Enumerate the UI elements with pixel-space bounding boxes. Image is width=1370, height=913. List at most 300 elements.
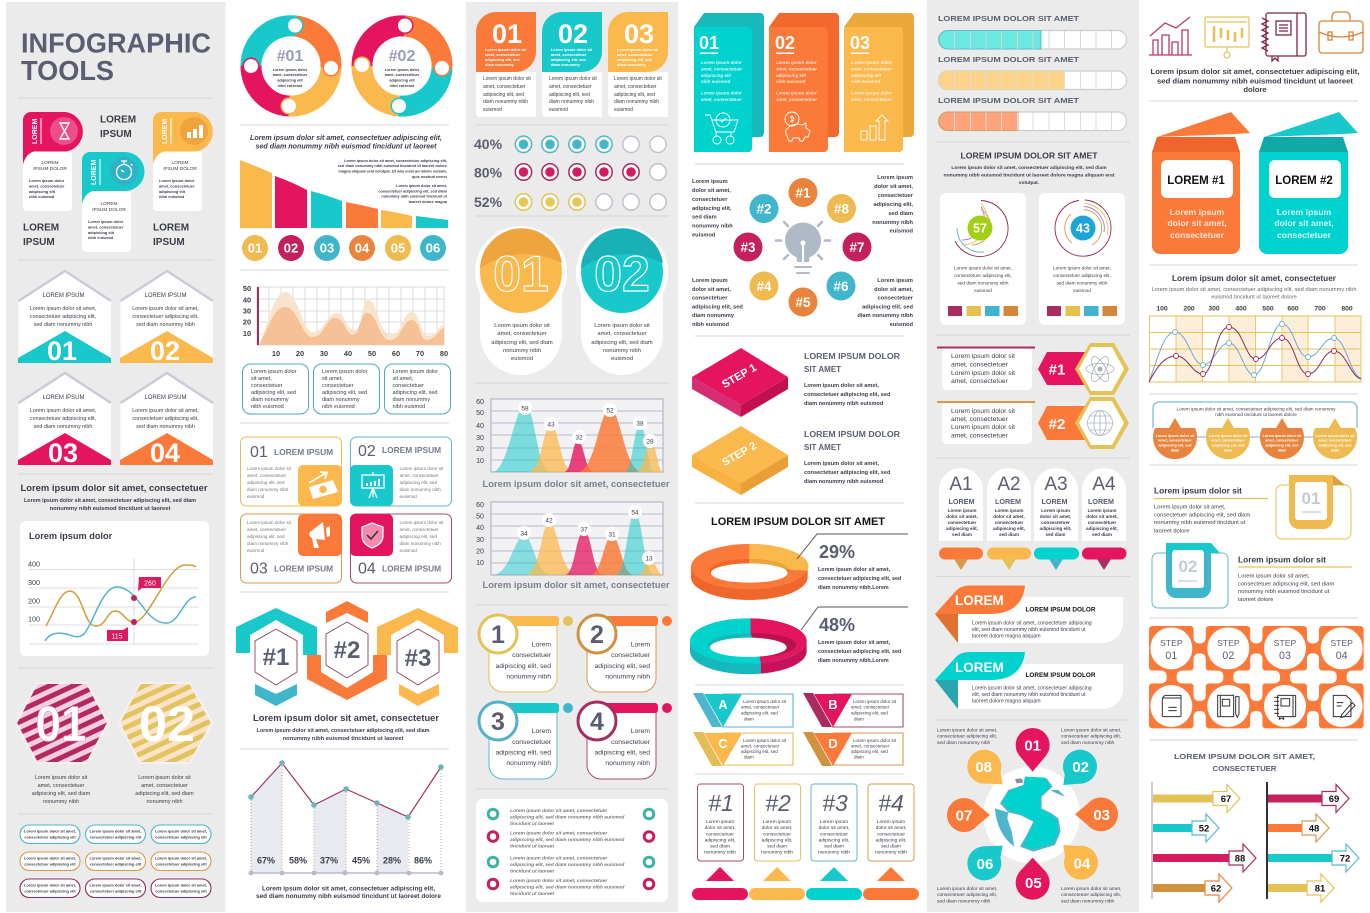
chart: dual curve on grid: 700 [1314, 306, 1326, 312]
text: bulb right bottom: Lorem ipsum [877, 278, 913, 284]
chart: donut 01: #01 [277, 48, 303, 65]
panel: house card 01: consectetuer adipiscing elit, [30, 314, 97, 320]
icon: line and bar chart [1149, 17, 1192, 55]
card: hash 1 [692, 784, 748, 900]
tag: B: amet, consectetuer [851, 704, 890, 710]
progress bar: yellow [938, 56, 1126, 90]
card: 01 money: Lorem ipsum dolor sit [247, 466, 292, 471]
text: icon caption: sed diam nonummy nibh euismod tincidunt ut laoreet [1157, 76, 1353, 86]
hexagon chain: #2 [334, 637, 360, 664]
panel: house card 02: LOREM IPSUM [144, 293, 187, 299]
grid: steps and icons: STEP [1330, 638, 1353, 648]
text: donut caption: sed diam nonummy nibh euismod tincidunt ut laoreet [256, 142, 437, 150]
chart: descending area bars: magna aliquam erat volutpat. Ut wisi enim ad minim veniam, [338, 170, 447, 174]
chart: peaks two: Lorem ipsum dolor sit amet, consectetuer [482, 580, 670, 590]
panel: four half circles: nibh euismod tincidunt ut laoreet dolore [1215, 412, 1297, 417]
card: hash 3: Lorem ipsum [820, 819, 848, 825]
grid: steps and icons: 03 [1279, 650, 1291, 662]
panel: leaf tab 02: Lorem ipsum dolor sit [551, 47, 593, 52]
text: globe corners: consectetuer adipiscing elit, [1061, 734, 1121, 740]
diagram: lightbulb with eight badges: #1 [795, 186, 811, 200]
icon: notebook [1262, 13, 1306, 61]
chart: descending area bars: Lorem ipsum dolor sit amet, [396, 184, 447, 188]
panel: four half circles: diam [1224, 448, 1233, 452]
icon: money [309, 472, 338, 499]
text: folder 01 copy: Lorem ipsum dolor sit amet, [1154, 504, 1226, 510]
text: step 1: Lorem ipsum dolor sit amet, [804, 383, 879, 389]
text: folder 01 copy: nonummy nibh euismod tincidunt ut [1154, 520, 1246, 526]
panel: leaf tab 03: Lorem ipsum dolor sit [617, 47, 659, 52]
panel: four half circles: diam [1331, 448, 1340, 452]
card: A2 [987, 468, 1031, 570]
heading: donut section: LOREM IPSUM DOLOR SIT AMET [711, 516, 885, 528]
chart: dual curve on grid [1149, 306, 1361, 382]
hexagon chain: #3 [405, 645, 431, 672]
panel: house card 04: 04 [150, 438, 180, 468]
chart: descending area bars: sed diam nonummy nibh euismod tincidunt ut laoreet dolore [338, 164, 447, 168]
text: icon caption: Lorem ipsum dolor sit amet, consectetuer adipiscing elit, [1150, 67, 1360, 76]
text: bulb right top: euismod [890, 228, 914, 234]
text: globe corners: sed diam nonummy nibh [937, 740, 991, 746]
chart: arrows left [1151, 782, 1256, 902]
icon: presentation chart [1205, 17, 1249, 58]
panel: tab card yellow: LOREM [162, 119, 169, 144]
card: hash 3: nonummy nibh [818, 850, 850, 856]
grid: steps and icons: 02 [1222, 650, 1234, 662]
card: 01 money: LOREM IPSUM [274, 447, 333, 457]
chart: peaks two: 60 [476, 502, 484, 509]
card: 03 megaphone: 03 [250, 560, 268, 578]
text: globe corners: Lorem ipsum dolor sit amet, [1061, 728, 1121, 734]
card: hash 3: dolor sit amet, [819, 825, 849, 831]
tag: D: diam [854, 754, 864, 760]
panel: house card 04: sed diam nonummy nibh [136, 424, 195, 430]
text: bulb left bottom: adipiscing elit, sed [692, 304, 743, 310]
panel: leaf tab 03: 03 [624, 19, 654, 49]
icon: growth bars [861, 115, 888, 140]
card: numbered 1 [479, 615, 573, 692]
panel: tab card yellow: adipiscing elit [159, 189, 186, 194]
panel: list with ring bullets: Lorem ipsum dolor sit amet, consectetuer [510, 878, 608, 884]
icon: folder 02 [1152, 543, 1228, 608]
panel: book 03: adipiscing elit [851, 73, 882, 78]
heading: curve chart: Lorem ipsum dolor sit amet, consectetuer adipiscing elit, sed diam nonummy nibh [1152, 287, 1356, 293]
panel: leaf tab 01 [476, 12, 536, 117]
text: hexagon 01 caption: amet, consectetuer [38, 783, 85, 789]
chart: peaks one [476, 399, 670, 489]
panel: leaf tab 01: adipiscing elit, sed [485, 57, 520, 62]
card: numbered 2: Lorem [631, 642, 650, 648]
card: 01 money: amet, consectetuer [247, 473, 287, 478]
panel: list with ring bullets: adipiscing elit, sed diam nonummy nibh euismod [510, 814, 625, 820]
text: bulb left top: consectetuer [692, 197, 728, 203]
panel: tab card teal: adipiscing elit [88, 230, 115, 235]
icon: briefcase [1319, 12, 1363, 53]
text boxes: three callouts: adipiscing elit, sed [251, 390, 296, 396]
card: 01 money [240, 437, 342, 506]
label: lorem ipsum: IPSUM [100, 129, 132, 140]
tag: A: diam [744, 716, 754, 722]
text: step 1: SIT AMET [804, 365, 841, 374]
panel: big bubble 02 [576, 226, 668, 375]
chart: peaks two: 20 [476, 548, 484, 556]
panel: tab card magenta: nibh euismod [29, 194, 55, 199]
text: globe corners: sed diam nonummy nibh [937, 898, 991, 904]
panel: tab card magenta: IPSUM DOLOR [33, 166, 67, 172]
panel: house card 04 [120, 373, 213, 468]
card: A1: LOREM [949, 497, 974, 506]
panel: book 03: amet, consectetuer [851, 66, 892, 72]
text: step 2 [804, 430, 900, 485]
text: step 2: SIT AMET [804, 443, 841, 452]
chart: percent dot rows: 40% [474, 136, 503, 152]
pills: three by three text chips: consectetuer adipiscing elit [155, 862, 207, 866]
panel: roof card 1: consectetuer [1170, 230, 1225, 240]
pills: three by three text chips: Lorem ipsum dolor sit amet, [155, 828, 207, 834]
diagram: lightbulb with eight badges [734, 178, 872, 316]
panel: tab card teal: amet, consectetuer [88, 224, 124, 230]
chart: 3D ring 48%: Lorem ipsum dolor sit amet, [818, 640, 891, 646]
progress bar: teal: LOREM IPSUM DOLOR SIT AMET [938, 15, 1080, 23]
text: folder 02 copy: nonummy nibh euismod tincidunt ut [1238, 589, 1330, 595]
card: 02 presentation: amet, consectetuer [400, 473, 439, 478]
panel: roof card 1: LOREM #1 [1167, 175, 1225, 187]
chart: peaks two: 42 [545, 518, 553, 524]
panel: tab card magenta: LOREM [41, 160, 59, 166]
panel: book 02: Lorem ipsum dolor [776, 90, 817, 96]
chart: peaks one: 60 [476, 399, 484, 406]
row: hex tag 1: Lorem ipsum dolor sit [951, 353, 1015, 360]
block: step 2 [692, 426, 788, 495]
panel: house card 02: Lorem ipsum dolor sit amet, [132, 306, 199, 312]
label: lorem ipsum: LOREM [153, 222, 189, 234]
text: hexagon 02 caption [135, 775, 194, 805]
diagram: globe with eight pins: 05 [1025, 875, 1042, 892]
text: bulb right top: sed diam [888, 211, 913, 217]
card: A3: sed diam [1046, 532, 1065, 537]
diagram: globe with eight pins: 03 [1093, 807, 1110, 824]
card: numbered 4: consectetuer [611, 739, 651, 746]
card: numbered 3: 3 [491, 708, 505, 736]
panel: tab card yellow [153, 112, 213, 211]
chart: peaks one: 10 [476, 458, 484, 465]
ribbon: teal lorem: Lorem ipsum dolor sit amet, consectetuer adipiscing [972, 686, 1092, 692]
pills: three by three text chips: consectetuer adipiscing elit [24, 862, 76, 866]
card: numbered 2: nonummy nibh [605, 674, 650, 680]
card: hash 1: consectetuer [706, 832, 734, 838]
card: A2: dolor sit amet, [993, 514, 1025, 519]
tag: C: C [718, 736, 728, 751]
text: bulb right top [872, 175, 914, 234]
number row: 01 to 06: 02 [284, 240, 298, 256]
chart: dual line chart: Lorem ipsum dolor [29, 531, 113, 541]
pills: three by three text chips: consectetuer adipiscing elit [90, 888, 142, 894]
grid: steps and icons: STEP [1274, 638, 1297, 648]
chart: area on grid: 30 [243, 306, 251, 316]
panel: big bubble 01: 01 [493, 246, 549, 302]
card: rings 57: sed diam nonummy nibh [957, 280, 1009, 286]
panel: book 02 [769, 13, 839, 152]
card: 03 megaphone: euismod [247, 548, 265, 553]
panel: four half circles: diam [1171, 448, 1180, 452]
card: rings 57: 57 [973, 222, 987, 236]
panel: leaf tab 03: diam nonummy [617, 62, 647, 67]
hexagon chain [236, 601, 458, 706]
panel: house card 01: LOREM IPSUM [42, 293, 85, 299]
card: numbered 2: consectetuer [611, 652, 651, 659]
chart: dual curve on grid: 400 [1235, 306, 1247, 312]
card: hash 2: #2 [765, 790, 791, 816]
ribbon: teal lorem: LOREM IPSUM DOLOR [1026, 672, 1096, 679]
heading: curve chart: Lorem ipsum dolor sit amet, consectetuer [1172, 273, 1337, 283]
panel: roof card 2: Lorem ipsum [1277, 207, 1332, 217]
progress bar: teal [938, 15, 1126, 49]
chart: peaks one: 20 [476, 446, 484, 453]
number row: 01 to 06: 05 [391, 240, 405, 256]
text: hexagon 01 caption [32, 775, 91, 805]
chart: peaks one: 30 [476, 435, 484, 442]
row: hex tag 1: amet, consectetuer [951, 378, 1009, 385]
card: A1: dolor sit amet, [946, 514, 978, 519]
chart: descending area bars: consectetuer adipiscing elit, sed diam [378, 190, 448, 194]
card: A4: LOREM [1088, 497, 1114, 506]
tag: D: adipiscing elit, sed [851, 749, 888, 754]
panel: big bubble 01: nonummy nibh [503, 348, 541, 354]
panel: leaf tab 01: diam nonummy [485, 62, 515, 67]
text: step 1: consectetuer adipiscing elit, sed [804, 392, 891, 398]
text: bulb right bottom: consectetuer [878, 296, 914, 302]
panel: book 01 [694, 13, 764, 152]
card: A2: A2 [997, 474, 1021, 495]
panel: tab card teal: nibh euismod [88, 235, 114, 240]
card: A4: Lorem ipsum [1088, 508, 1116, 513]
text boxes: three callouts: adipiscing elit, sed [392, 390, 437, 396]
text: bulb left top: sed diam [692, 214, 717, 220]
ribbon: teal lorem [935, 652, 1123, 709]
chart: area on grid: 80 [440, 349, 448, 358]
card: hash 4: sed diam [881, 844, 901, 850]
tag: A: Lorem ipsum dolor sit [743, 699, 787, 704]
card: 04 shield: euismod [400, 548, 417, 553]
text boxes: three callouts: consectetuer [392, 383, 424, 389]
pills: three by three text chips: Lorem ipsum dolor sit amet, [89, 828, 142, 834]
panel: list with ring bullets: adipiscing elit, sed diam nonummy nibh euismod [510, 862, 625, 868]
card: 04 shield: 04 [358, 560, 376, 578]
callout: 260 [138, 577, 161, 591]
panel: tab card teal: IPSUM DOLOR [92, 207, 126, 213]
panel: leaf tab 03: adipiscing elit, sed [617, 57, 652, 62]
tag: A [693, 693, 793, 727]
pills: three by three text chips: Lorem ipsum dolor sit amet, [24, 828, 76, 834]
chart: area on grid: 10 [243, 329, 251, 338]
card: hash 1: adipiscing elit, [705, 838, 735, 844]
chart: donut 01 [242, 17, 340, 114]
tag: C [693, 732, 793, 766]
chart: donut 02: amet, consectetuer [385, 73, 420, 77]
chart: peaks one: 38 [636, 420, 644, 428]
icon: document pen [1333, 695, 1355, 717]
card: 03 megaphone: amet, consectetuer [247, 527, 287, 532]
text: bulb right bottom [857, 278, 914, 328]
chart: descending area bars: laoreet dolore magna [409, 200, 448, 204]
card: hash 3: adipiscing elit, [819, 838, 849, 844]
grid: steps and icons: 01 [1165, 650, 1177, 662]
grid: steps and icons: STEP [1217, 638, 1240, 648]
panel: tab card teal: LOREM [91, 160, 98, 185]
hexagon chain: #1 [263, 644, 289, 671]
heading: column 1 section: Lorem ipsum dolor sit amet, consectetuer [20, 483, 208, 494]
panel: big bubble 02: 02 [594, 246, 650, 302]
ribbon: teal lorem: laoreet dolore magna aliquam [972, 698, 1041, 704]
card: 02 presentation [350, 437, 452, 506]
heading: arrow section: LOREM IPSUM DOLOR SIT AMET, [1174, 752, 1315, 761]
chart: area on grid: 70 [416, 349, 424, 358]
tag: C: amet, consectetuer [741, 744, 780, 748]
chart: donut 01: amet, consectetuer [273, 73, 308, 77]
panel: leaf tab 02: 02 [558, 19, 588, 49]
card: hash 4: nonummy nibh [875, 850, 907, 856]
tag: A: A [718, 697, 728, 712]
panel: leaf tab 01: Lorem ipsum dolor sit [485, 47, 527, 52]
card: numbered 3 [479, 702, 573, 779]
panel: leaf tab 03: amet, consectetuer [614, 84, 657, 90]
icon: shield [362, 523, 383, 548]
card: A3: consectetuer [1041, 520, 1070, 525]
panel: house card 02: sed diam nonummy nibh [136, 322, 195, 328]
card: A2: consectetuer [995, 520, 1024, 525]
tag: D: Lorem ipsum dolor sit [853, 738, 897, 743]
chart: 3D ring 29%: consectetuer adipiscing elit, sed [818, 576, 901, 582]
text: bulb right top: Lorem ipsum [877, 175, 913, 181]
text: bulb left bottom [692, 278, 743, 328]
panel: list with ring bullets: adipiscing elit, sed diam nonummy nibh euismod [510, 884, 625, 890]
chart: arrows left: 62 [1211, 884, 1221, 894]
chart: arrows right: 81 [1315, 884, 1326, 894]
panel: leaf tab 01: diam nonummy nibh [483, 99, 528, 105]
panel: leaf tab 02: euismod [549, 107, 568, 113]
card: hash 4: #4 [878, 790, 904, 816]
text: globe corners: Lorem ipsum dolor sit amet, [1061, 886, 1121, 892]
chart: 3D ring 48%: consectetuer adipiscing elit, sed [818, 649, 901, 655]
chart: donut 02: #02 [389, 48, 415, 65]
text: bulb right top: adipiscing elit, [873, 202, 913, 208]
icon: atom [1086, 354, 1114, 384]
text: hexagon 01 caption: adipiscing elit, sed diam [32, 791, 91, 797]
chart: area on grid [243, 284, 448, 358]
card: 03 megaphone [240, 514, 342, 583]
panel: four half circles: Lorem ipsum dolor sit [1209, 434, 1248, 438]
card: numbered 1: Lorem [532, 642, 551, 648]
text: folder 02 copy: Lorem ipsum dolor sit amet, [1238, 574, 1310, 580]
pills: three by three text chips: consectetuer adipiscing elit [24, 834, 76, 840]
text boxes: three callouts: nibh euismod [322, 404, 355, 410]
block: step 1 [692, 348, 788, 417]
card: hash 4: dolor sit amet, [876, 825, 906, 831]
row: hex tag 2: amet, consectetuer [951, 432, 1009, 440]
text: globe corners: consectetuer adipiscing elit, [1061, 892, 1121, 898]
panel: list with ring bullets: Lorem ipsum dolor sit amet, consectetuer [510, 830, 608, 836]
chart: peaks one: 52 [606, 408, 614, 414]
card: hash 1: Lorem ipsum [706, 819, 734, 825]
panel: big bubble 02: adipiscing elit, sed diam [591, 340, 653, 346]
chart: percent line: 45% [352, 856, 370, 866]
text: bulb right bottom: adipiscing elit, sed [862, 304, 914, 310]
text: bulb right top: nonummy nibh [872, 220, 914, 226]
card: numbered 4: adipiscing elit, sed [594, 750, 650, 756]
block: step 1: STEP 1 [720, 362, 759, 391]
panel: list with ring bullets: tincidunt ut laoreet [510, 821, 554, 827]
card: 02 presentation: LOREM IPSUM [382, 445, 441, 455]
text: bulb left top: euismod [692, 232, 716, 238]
card: 01 money: diam nonummy nibh [247, 487, 289, 492]
diagram: lightbulb with eight badges: #8 [834, 202, 849, 216]
card: numbered 3: nonummy nibh [506, 760, 551, 767]
icon: book [1162, 695, 1181, 717]
panel: tab card teal: Lorem ipsum dolor [88, 219, 124, 224]
card: hash 2: consectetuer [763, 832, 791, 838]
pills: three by three text chips: Lorem ipsum dolor sit amet, [155, 856, 207, 860]
card: A2: LOREM [995, 497, 1021, 506]
card: numbered 1: adipiscing elit, sed [495, 663, 551, 670]
panel: tab card magenta: adipiscing elit [29, 189, 56, 194]
tag: B: B [828, 697, 838, 712]
ribbon: orange lorem: Lorem ipsum dolor sit amet, consectetuer adipiscing [972, 620, 1092, 626]
chart: percent line: 37% [320, 856, 338, 866]
text: bulb left top: Lorem ipsum [692, 179, 728, 185]
panel: house card 01 [18, 271, 111, 366]
panel: tab card magenta: Lorem ipsum dolor [29, 178, 65, 183]
panel: leaf tab 01: amet, consectetuer [483, 84, 526, 90]
text: folder 01 copy: Lorem ipsum dolor sit [1154, 486, 1242, 496]
text boxes: three callouts: nibh euismod [251, 404, 284, 410]
chart: peaks two: 13 [645, 556, 653, 562]
card: A1 [939, 468, 983, 570]
card: A4 [1082, 468, 1126, 570]
card: 03 megaphone: adipiscing elit, sed [247, 534, 285, 539]
pills: three by three text chips: consectetuer adipiscing elit [155, 888, 207, 894]
card: hash 1: #1 [708, 790, 734, 816]
row: hex tag 1: amet, consectetuer [951, 362, 1009, 368]
heading: hexagon section: Lorem ipsum dolor sit amet, consectetuer adipiscing elit, sed diam [256, 728, 430, 734]
chart: donut 01: adipiscing elit [277, 78, 303, 82]
card: rings 43: sed diam nonummy nibh [1056, 280, 1108, 286]
text: folder 02 copy: Lorem ipsum dolor sit [1238, 554, 1326, 564]
pills: three by three text chips: consectetuer adipiscing elit [90, 862, 142, 866]
chart: peaks two: 54 [631, 510, 639, 516]
chart: area on grid: 30 [320, 349, 328, 358]
text: hexagon 02 caption: amet, consectetuer [141, 783, 188, 789]
text: bulb left bottom: Lorem ipsum [692, 278, 728, 284]
text: folder 02 copy: laoreet dolore [1238, 597, 1273, 603]
heading: column 1 section [20, 483, 208, 512]
text boxes: three callouts: sit amet, [392, 376, 414, 382]
text: bulb right top: dolor sit amet, [874, 184, 913, 190]
text: hexagon 02 caption: nonummy nibh [146, 799, 183, 805]
card: 04 shield: amet, consectetuer [400, 527, 439, 532]
chart: donut 02: Lorem ipsum dolor [385, 68, 420, 72]
chart: dual line chart [20, 521, 209, 656]
text: bulb left top: dolor sit amet, [692, 188, 731, 194]
number row: 01 to 06: 04 [355, 240, 370, 256]
label: lorem ipsum: IPSUM [153, 237, 185, 248]
tag: C: adipiscing elit, sed [741, 749, 778, 754]
heading: ring section: volutpat. [1019, 180, 1040, 186]
panel: book 02: amet, consectetuer [776, 66, 817, 72]
block: step 2: STEP 2 [720, 440, 759, 469]
row: hex tag 2 [937, 397, 1129, 449]
panel: house card 03: consectetuer adipiscing elit, [30, 416, 97, 422]
panel: book 01: Lorem ipsum dolor [701, 60, 742, 65]
